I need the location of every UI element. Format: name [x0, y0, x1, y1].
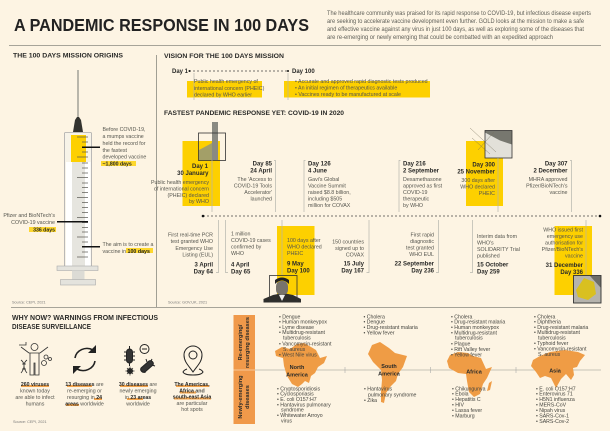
- event: day 65: [226, 220, 271, 276]
- stat: 13 diseases: 13 diseases are: [65, 382, 104, 388]
- list: Africa newly emerging: • Marburg: [452, 414, 475, 420]
- callout: mumps vaccine: Before COVID-19,: [102, 127, 145, 133]
- list: South America newly emerging: pulmonary syndrome: [368, 392, 417, 398]
- source: timeline: Source: GOV.UK, 2021: [168, 300, 207, 304]
- event: day 336: WHO issued first: [543, 228, 584, 234]
- event: day 64: test granted WHO: [171, 239, 213, 245]
- event: day 300: 25 November: [457, 170, 496, 176]
- list: Africa re-emerging: • Yellow fever: [451, 352, 482, 358]
- callout: mumps vaccine: developed vaccine: [102, 154, 146, 160]
- vision timeline: declared by WHO earlier: [194, 92, 252, 98]
- list: Africa re-emerging: • Multidrug-resistant: [451, 330, 497, 336]
- vision timeline: Day 1: [172, 69, 189, 75]
- list: South America re-emerging: • Dengue: [364, 320, 385, 326]
- list: Asia re-emerging: • Diphtheria: [534, 320, 561, 326]
- list: North America re-emerging: tuberculosis: [283, 336, 311, 342]
- timeline axis: [202, 215, 601, 217]
- list: North America newly emerging: • Cryptosporidiosis: [277, 386, 320, 392]
- intro text: are re-emerging or newly emerging that could be combatted with an expedited approach: [327, 34, 553, 41]
- list: North America re-emerging: • Human monkeypox: [279, 320, 327, 326]
- list: Africa re-emerging: • Rift Valley fever: [451, 347, 490, 353]
- event: day 336: [542, 220, 601, 303]
- map: North America: America: [286, 372, 309, 378]
- event: day 236: test granted: [406, 246, 434, 252]
- event: day 167: signed up to: [335, 246, 364, 252]
- callout: aim: vaccine in 100 days: [102, 249, 150, 255]
- list: Asia re-emerging: [534, 314, 588, 358]
- category labels: resurging diseases: [245, 317, 251, 368]
- list: Asia re-emerging: • Cholera: [534, 314, 556, 320]
- intro text: The healthcare community was praised for its rapid response to COVID-19, but infectious disease experts: [327, 10, 591, 17]
- event: day 236: Day 236: [411, 268, 435, 274]
- heading: why now: WHY NOW? WARNINGS FROM INFECTIOUS: [12, 315, 158, 322]
- stat: 13 diseases: areas worldwide: [65, 402, 104, 408]
- list: North America re-emerging: • Dengue: [279, 314, 301, 320]
- event: day 65: COVID-19 cases: [231, 238, 271, 244]
- event: day 126: raised $8.8 billion,: [308, 190, 351, 196]
- event: day 100: PHEIC: [287, 251, 303, 257]
- stat: 30 diseases: 30 diseases are: [119, 382, 157, 388]
- list: Africa re-emerging: • Cholera: [451, 314, 473, 320]
- event: day 259: Day 259: [477, 270, 500, 276]
- list: Asia newly emerging: • E. coli O157:H7: [536, 386, 576, 392]
- event: day 1: by WHO: [189, 199, 209, 205]
- stat: 260 viruses: 260 viruses: [21, 382, 49, 388]
- event: day 167: COVAX: [346, 252, 364, 258]
- intro text: and effective vaccine against any virus in just 100 days, as well as exploring some of the diseases that: [327, 26, 584, 33]
- stat: 30 diseases: in 23 areas: [125, 395, 151, 401]
- event: day 85: The 'Access to: [237, 177, 272, 183]
- list: North America re-emerging: • West Nile virus: [279, 352, 317, 358]
- event: day 167: 15 July: [344, 262, 365, 268]
- event: day 307: Day 307: [545, 162, 568, 168]
- event: day 85: Accelerator': [244, 190, 272, 196]
- list: North America re-emerging: • Lyme disease: [279, 325, 314, 331]
- event: day 1: Public health emergency: [151, 180, 209, 186]
- event: day 100: 100 days after: [287, 238, 321, 244]
- event: day 259: SOLIDARITY Trial: [477, 247, 520, 253]
- event: day 65: 4 April: [231, 262, 250, 268]
- event: day 336: Pfizer/BioNTech's: [542, 247, 583, 253]
- event: day 64: 3 April: [195, 262, 213, 268]
- map: South America: South: [381, 364, 397, 370]
- callout: Pfizer vaccine: [3, 213, 56, 234]
- intro text: [327, 10, 591, 41]
- callout: Pfizer vaccine: Pfizer and BioNTech's: [3, 213, 55, 219]
- list: Africa newly emerging: [452, 386, 486, 420]
- list: Africa newly emerging: • Ebola: [452, 392, 469, 398]
- stat: 30 diseases: newly emerging: [119, 388, 157, 394]
- map: North America: [275, 343, 327, 387]
- stat: hot spots: Africa and: [179, 388, 205, 394]
- vision timeline: international concern (PHEIC): [194, 86, 265, 92]
- event: day 216: [399, 160, 443, 212]
- map: South America: [368, 342, 407, 403]
- event: day 126: [304, 160, 351, 212]
- event: day 216: COVID-19: [403, 190, 427, 196]
- list: South America re-emerging: • Drug-resistant malaria: [364, 325, 418, 331]
- stat: 260 viruses: known today: [20, 388, 50, 394]
- event: day 259: [470, 220, 520, 276]
- list: Africa re-emerging: [451, 314, 505, 358]
- event: day 100: WHO declared: [287, 244, 322, 250]
- map: Africa: Africa: [466, 370, 483, 376]
- list: North America newly emerging: [277, 386, 331, 424]
- map: Asia: Asia: [549, 368, 562, 374]
- list: North America newly emerging: syndrome: [281, 408, 304, 414]
- list: North America re-emerging: • Multidrug-resistant: [279, 330, 325, 336]
- event: day 236: WHO EUL: [409, 252, 434, 258]
- list: Africa re-emerging: • Plague: [451, 342, 471, 348]
- list: North America newly emerging: • E. coli O157:H7: [277, 397, 317, 403]
- event: day 236: First rapid: [410, 232, 434, 238]
- event: day 236: [395, 220, 438, 274]
- list: North America re-emerging: • Vancomycin-resistant: [279, 342, 332, 348]
- event: day 307: [526, 160, 572, 212]
- event: day 126: Vaccine Summit: [308, 184, 346, 190]
- callout: aim: The aim is to create a: [102, 242, 153, 248]
- event: day 300: [457, 128, 512, 212]
- event: day 307: Pfizer/BioNTech's: [526, 184, 568, 190]
- event: day 236: 22 September: [395, 262, 435, 268]
- list: South America newly emerging: [364, 386, 417, 404]
- event: day 216: Day 216: [403, 162, 426, 168]
- event: day 85: Day 85: [253, 162, 273, 168]
- callout: aim: [102, 242, 153, 255]
- stat: 260 viruses: humans: [26, 402, 45, 408]
- vision timeline: • An initial regimen of therapeutics available: [295, 86, 397, 92]
- portrait photo: [264, 276, 301, 302]
- event: day 216: approved as first: [403, 184, 443, 190]
- event: day 1: 30 January: [177, 171, 209, 177]
- list: Asia newly emerging: • H5N1 influenza: [536, 397, 575, 403]
- vision timeline: Public health emergency of: [194, 79, 258, 85]
- icon: microbes: [124, 344, 155, 376]
- icon: human with viruses: [19, 342, 52, 375]
- map: Asia: [531, 350, 585, 388]
- source: origins: Source: CEPI, 2021: [12, 300, 46, 304]
- event: day 65: Day 65: [231, 270, 251, 276]
- heading: origins: THE 100 DAYS MISSION ORIGINS: [13, 52, 124, 60]
- event: day 216: 2 September: [403, 168, 440, 174]
- list: North America newly emerging: • Whitewater Arroyo: [277, 413, 323, 419]
- event: day 126: including $505: [308, 196, 342, 202]
- list: North America newly emerging: • Cyclosporiasis: [277, 392, 314, 398]
- list: Asia re-emerging: • Typhoid fever: [534, 341, 569, 347]
- vision timeline: Day 100: [292, 69, 315, 75]
- stat: 30 diseases: worldwide: [126, 402, 150, 408]
- event: day 100: Day 100: [287, 268, 310, 274]
- event: day 307: 2 December: [533, 168, 568, 174]
- event: day 85: [234, 160, 276, 212]
- event: day 1: (PHEIC) declared: [167, 193, 209, 199]
- vision timeline: [172, 69, 430, 100]
- category labels: [234, 315, 255, 424]
- icon: location pin: [183, 346, 203, 375]
- list: North America newly emerging: virus: [281, 418, 292, 424]
- vision timeline: • Accurate and approved rapid diagnostic tests produced: [295, 79, 428, 85]
- event: day 336: emergency use: [547, 234, 583, 240]
- event: day 259: WHO's: [477, 240, 494, 246]
- intro text: are seeking to accelerate vaccine development even further. GOLD looks at the mission to make a safe: [327, 18, 585, 25]
- event: day 307: vaccine: [550, 190, 568, 196]
- list: Africa re-emerging: tuberculosis: [455, 336, 483, 342]
- list: South America newly emerging: • Hantavirus: [364, 386, 392, 392]
- stat: 260 viruses: are able to infect: [15, 395, 55, 401]
- syringe illustration: [57, 70, 100, 285]
- event: day 85: launched: [250, 196, 272, 202]
- list: Africa re-emerging: • Human monkeypox: [451, 325, 499, 331]
- heading: fastest response: FASTEST PANDEMIC RESPONSE YET: COVID-19 IN 2020: [164, 110, 344, 117]
- event: day 236: diagnostic: [410, 239, 434, 245]
- event: day 336: Day 336: [560, 270, 584, 276]
- callout: mumps vaccine: a mumps vaccine: [102, 134, 144, 140]
- event: day 216: by WHO: [403, 203, 423, 209]
- map: North America: North: [290, 365, 305, 371]
- stat: hot spots: are particular: [177, 401, 208, 407]
- event: day 167: 150 countries: [332, 240, 364, 246]
- list: South America newly emerging: • Zika: [364, 398, 377, 404]
- event: day 126: Day 126: [308, 162, 331, 168]
- event: day 336: vaccine: [565, 254, 583, 260]
- event: day 216: Dexamethasone: [403, 177, 442, 183]
- heading: vision: VISION FOR THE 100 DAYS MISSION: [164, 53, 284, 60]
- list: Asia re-emerging: • Drug-resistant malaria: [534, 325, 588, 331]
- list: Asia re-emerging: S. aureus: [538, 352, 561, 358]
- event: day 336: authorisation for: [545, 240, 583, 246]
- list: Asia newly emerging: [536, 386, 576, 425]
- event: day 167: [332, 220, 369, 274]
- event: day 65: WHO: [231, 251, 244, 257]
- callout: Pfizer vaccine: COVID-19 vaccine: [11, 220, 55, 226]
- list: Asia newly emerging: • SARS-Cov-2: [536, 419, 569, 425]
- event: day 300: 300 days after: [461, 178, 495, 184]
- stat: 13 diseases: re-emerging or: [67, 388, 102, 394]
- vaccination photo: [574, 276, 601, 303]
- callout: mumps vaccine: the fastest: [102, 148, 127, 154]
- icon: refresh arrows: [73, 345, 96, 374]
- event: day 64: [168, 220, 218, 276]
- event: day 126: million for COVAX: [308, 203, 351, 209]
- list: North America re-emerging: [279, 314, 332, 358]
- event: day 65: confirmed by: [231, 244, 262, 250]
- event: day 259: Interim data from: [477, 234, 518, 240]
- list: Asia newly emerging: • Nipah virus: [536, 408, 566, 414]
- map: Africa: [447, 352, 492, 397]
- event: day 1: of international concern: [154, 186, 209, 192]
- stat: 13 diseases: [65, 382, 104, 408]
- source: surveillance: Source: CEPI, 2021: [13, 420, 47, 424]
- category labels: Newly-emerging: [238, 375, 244, 419]
- event: day 300: Day 300: [472, 162, 496, 168]
- list: North America newly emerging: • Hantavirus pulmonary: [277, 402, 331, 408]
- event: day 126: Gavi's Global: [308, 177, 339, 183]
- category labels: diseases: [245, 385, 251, 409]
- title: A PANDEMIC RESPONSE IN 100 DAYS: [14, 15, 309, 35]
- event: day 64: First real-time PCR: [168, 232, 213, 238]
- event: day 64: Emergency Use: [175, 246, 213, 252]
- event: day 216: therapeutic: [403, 196, 430, 202]
- list: South America re-emerging: • Yellow fever: [364, 330, 395, 336]
- list: Asia newly emerging: • Enterovirus 71: [536, 392, 573, 398]
- event: day 1: Day 1: [192, 164, 209, 170]
- stat: hot spots: [173, 382, 211, 413]
- event: day 1: [151, 122, 226, 212]
- list: Africa newly emerging: • Lassa fever: [452, 408, 482, 414]
- map: South America: America: [378, 372, 401, 378]
- list: Asia newly emerging: • SARS-Cov-1: [536, 414, 569, 420]
- event: day 167: Day 167: [341, 268, 365, 274]
- callout: mumps vaccine: held the record for: [102, 141, 146, 147]
- event: day 85: 24 April: [250, 168, 272, 174]
- event: day 336: 31 December: [546, 263, 584, 269]
- event: day 100: 9 May: [287, 262, 304, 268]
- list: Asia re-emerging: tuberculosis: [538, 336, 566, 342]
- event: day 100: [264, 220, 322, 302]
- vision timeline: • Vaccines ready to be manufactured at scale: [295, 92, 401, 98]
- list: South America re-emerging: • Cholera: [364, 314, 385, 320]
- event: day 85: COVID-19 Tools: [234, 184, 272, 190]
- callout: mumps vaccine: [101, 127, 146, 168]
- event: day 259: 15 October: [477, 262, 509, 268]
- list: North America re-emerging: S. aureus: [283, 347, 306, 353]
- list: Africa newly emerging: • HIV: [452, 402, 464, 408]
- event: day 307: MHRA approved: [529, 177, 568, 183]
- list: South America re-emerging: [364, 314, 418, 336]
- event: day 259: published: [477, 254, 500, 260]
- list: Africa newly emerging: • Chikungunya: [452, 386, 486, 392]
- heading: why now: DISEASE SURVEILLANCE: [12, 324, 91, 331]
- list: Africa re-emerging: • Drug-resistant malaria: [451, 320, 505, 326]
- callout: mumps vaccine: ~1,800 days: [102, 162, 132, 168]
- callout: Pfizer vaccine: 336 days: [33, 228, 55, 234]
- event: day 65: 1 million: [231, 232, 250, 238]
- event: day 300: PHEIC: [479, 191, 495, 197]
- event: day 300: WHO declared: [460, 184, 495, 190]
- list: Africa newly emerging: • Hepatitis C: [452, 397, 481, 403]
- stat: 260 viruses: [15, 382, 55, 408]
- stat: 30 diseases: [119, 382, 157, 408]
- list: Asia re-emerging: • Vancomycin-resistant: [534, 346, 587, 352]
- list: Asia re-emerging: • Multidrug-resistant: [534, 330, 580, 336]
- event: day 64: Listing (EUL): [182, 252, 213, 258]
- event: day 64: Day 64: [194, 270, 214, 276]
- category labels: Re-emerging/: [238, 324, 244, 360]
- event: day 126: 4 June: [308, 168, 328, 174]
- list: Asia newly emerging: • MERS-CoV: [536, 402, 567, 408]
- stat: hot spots: south-east Asia: [173, 394, 211, 400]
- stat: hot spots: hot spots: [181, 407, 203, 413]
- stat: 13 diseases: resurging in 24: [67, 395, 102, 401]
- stat: hot spots: The Americas,: [174, 382, 210, 388]
